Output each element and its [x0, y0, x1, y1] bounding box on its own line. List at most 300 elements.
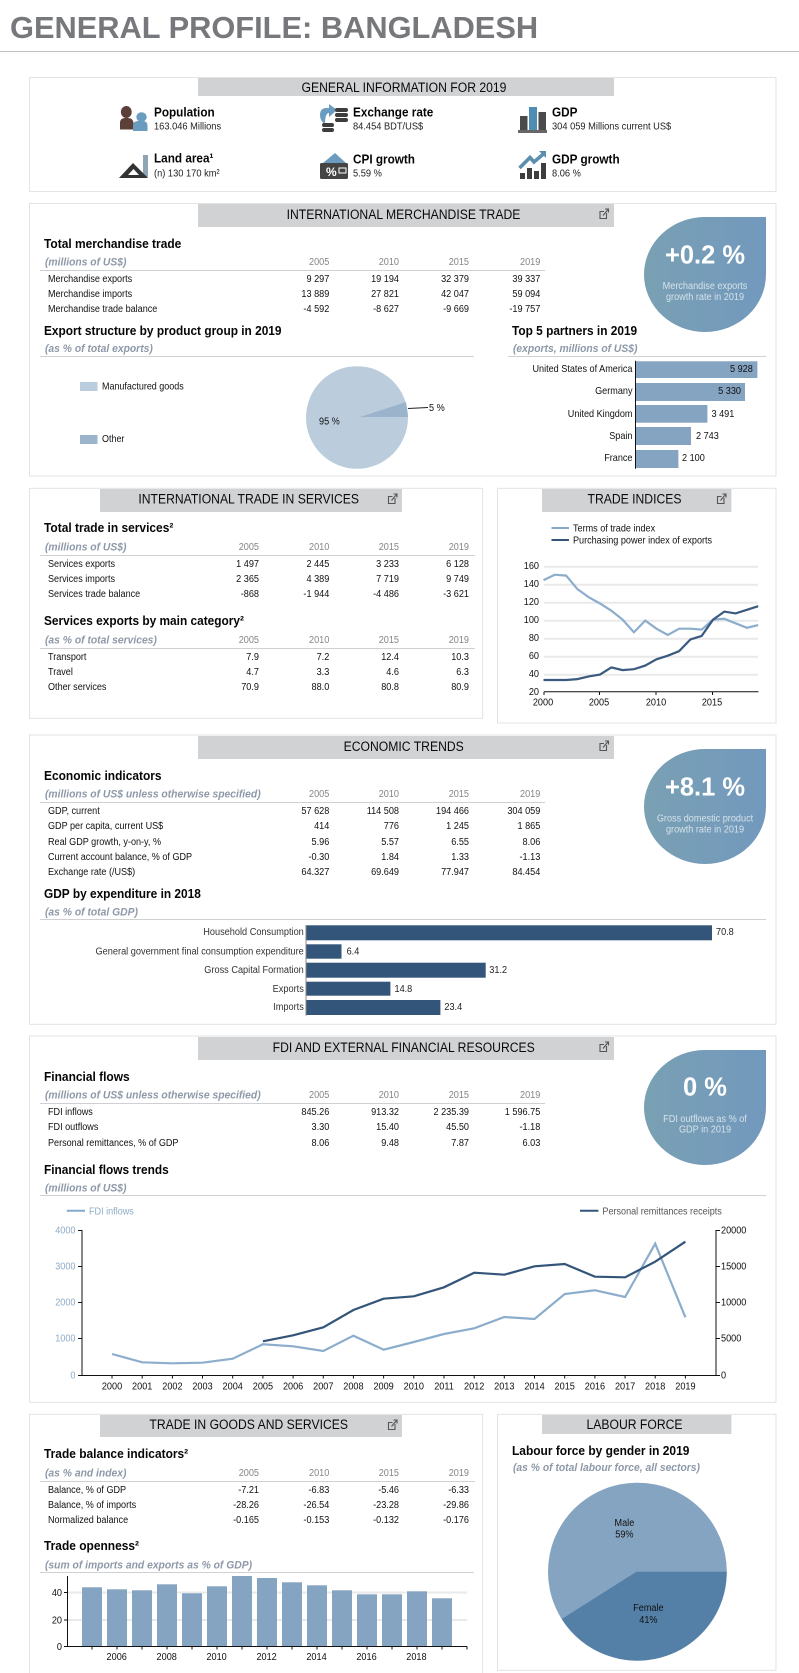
- table: total merchandise trade: 59 094: [512, 288, 541, 300]
- table: total trade in services: 2019: [449, 541, 469, 553]
- table: trade balance indicators: Balance, % of GDP: [48, 1484, 127, 1496]
- legend: export structure: [80, 381, 184, 445]
- table: economic indicators: Exchange rate (/US$): [48, 866, 135, 878]
- line chart: financial flows trends: 3000: [55, 1261, 76, 1273]
- callout: merchandise exports growth: Merchandise exports: [663, 280, 747, 292]
- stat: population: 163.046 Millions: [154, 121, 221, 133]
- table: economic indicators: 304 059: [507, 805, 540, 817]
- legend: trade indices: Terms of trade index: [573, 523, 655, 535]
- pie chart: export structure: [306, 366, 445, 469]
- table: economic indicators: 5.96: [312, 836, 330, 848]
- line chart: trade indices: [524, 560, 758, 709]
- table: total trade in services: -1 944: [303, 588, 330, 600]
- panel: fdi and external financial resources: [30, 1036, 776, 1402]
- table: total trade in services: 2 365: [236, 573, 259, 585]
- table: economic indicators: Current account balance, % of GDP: [48, 851, 193, 863]
- table: economic indicators: 1.33: [451, 851, 469, 863]
- pie chart: labour force by gender: Female: [633, 1602, 664, 1614]
- table: trade balance indicators: -0.165: [233, 1514, 259, 1526]
- line chart: financial flows trends: 0: [721, 1370, 727, 1382]
- stat: exchange rate: Exchange rate: [353, 105, 434, 120]
- stat: cpi growth: [353, 152, 415, 180]
- bar chart: gdp by expenditure: Imports: [273, 1001, 304, 1013]
- table: total trade in services: 3 233: [376, 558, 399, 570]
- heading: fdi and external financial resources: FDI AND EXTERNAL FINANCIAL RESOURCES: [273, 1039, 535, 1055]
- table: financial flows: 45.50: [446, 1121, 469, 1133]
- line chart: financial flows trends: 2005: [253, 1381, 274, 1393]
- table: economic indicators: 77.947: [441, 866, 469, 878]
- table: economic indicators: Real GDP growth, y-on-y, %: [48, 836, 161, 848]
- table: economic indicators: 57 628: [301, 805, 330, 817]
- line chart: financial flows trends: 2011: [434, 1381, 454, 1393]
- callout: fdi outflows: 0 %: [683, 1074, 727, 1102]
- line chart: financial flows trends: 2013: [494, 1381, 515, 1393]
- stat: gdp: [552, 105, 672, 133]
- icon: external link: [388, 494, 397, 504]
- table: trade balance indicators: 2015: [379, 1467, 399, 1479]
- heading: gdp by expenditure: [40, 887, 766, 920]
- bar chart: trade openness: [52, 1576, 467, 1663]
- table: total merchandise trade: 13 889: [301, 288, 329, 300]
- line chart: financial flows trends: 1000: [55, 1333, 76, 1345]
- callout: merchandise exports growth: +0.2 %: [665, 242, 745, 270]
- line chart: financial flows trends: 2007: [313, 1381, 333, 1393]
- bar chart: top 5 partners: 5 330: [718, 385, 741, 397]
- table: total merchandise trade: 39 337: [512, 273, 540, 285]
- heading: gdp by expenditure: (as % of total GDP): [45, 906, 138, 919]
- bar chart: trade openness: 0: [57, 1641, 62, 1653]
- table: financial flows: 9.48: [381, 1137, 399, 1149]
- heading: financial flows trends: (millions of US$): [45, 1182, 127, 1195]
- icon: gdp growth: [520, 151, 546, 179]
- table: trade balance indicators: -0.153: [303, 1514, 330, 1526]
- table: economic indicators: 114 508: [367, 805, 399, 817]
- heading: top 5 partners: (exports, millions of US$): [513, 343, 638, 355]
- line chart: financial flows trends: 2002: [162, 1381, 183, 1393]
- table: financial flows: Personal remittances, % of GDP: [48, 1137, 179, 1149]
- bar chart: trade openness: 2008: [157, 1651, 177, 1663]
- table: total merchandise trade: 9 297: [306, 273, 329, 285]
- pie chart: labour force by gender: Male: [615, 1517, 635, 1529]
- panel: economic trends: [30, 735, 776, 1024]
- line chart: financial flows trends: 2012: [464, 1381, 484, 1393]
- heading: export structure: Export structure by product group in 2019: [44, 324, 282, 338]
- stat: gdp growth: [552, 152, 620, 180]
- panel: trade indices: [498, 488, 776, 723]
- table: total trade in services: Services imports: [48, 573, 115, 585]
- table: total trade in services: -3 621: [443, 588, 469, 600]
- table: services exports by main category: 2005: [239, 634, 259, 646]
- table: total merchandise trade: 32 379: [441, 273, 469, 285]
- table: economic indicators: -1.13: [520, 851, 541, 863]
- heading: top 5 partners: Top 5 partners in 2019: [512, 324, 637, 338]
- table: total merchandise trade: 19 194: [371, 273, 399, 285]
- table: financial flows: 15.40: [376, 1121, 399, 1133]
- table: total merchandise trade: 42 047: [441, 288, 469, 300]
- table: services exports by main category: 80.8: [381, 681, 399, 693]
- table: total trade in services: Total trade in services²: [44, 521, 173, 535]
- line chart: trade indices: 40: [529, 668, 539, 680]
- table: economic indicators: 194 466: [436, 805, 469, 817]
- stat: gdp: GDP: [552, 105, 577, 120]
- table: total trade in services: 6 128: [446, 558, 469, 570]
- table: total trade in services: 2010: [309, 541, 330, 553]
- callout: gdp growth rate: growth rate in 2019: [666, 824, 744, 836]
- table: economic indicators: 69.649: [371, 866, 399, 878]
- bar chart: top 5 partners: 2 100: [682, 452, 705, 464]
- legend: export structure: Manufactured goods: [102, 381, 184, 393]
- table: services exports by main category: Travel: [48, 666, 73, 678]
- table: economic indicators: 2005: [309, 788, 330, 800]
- callout: gdp growth rate: Gross domestic product: [657, 813, 753, 825]
- icon: external link: [600, 209, 608, 218]
- subheading: labour force by gender: [512, 1444, 700, 1474]
- table: trade balance indicators: 2005: [239, 1467, 259, 1479]
- stat: population: Population: [154, 105, 215, 120]
- table: total merchandise trade: -19 757: [509, 303, 540, 315]
- bar chart: trade openness: 2018: [406, 1651, 427, 1663]
- callout: merchandise exports growth: [644, 217, 766, 332]
- table: financial flows: (millions of US$ unless otherwise specified): [45, 1089, 261, 1101]
- table: trade balance indicators: -0.132: [373, 1514, 399, 1526]
- table: financial flows: -1.18: [520, 1121, 541, 1133]
- heading: top 5 partners: [508, 324, 766, 356]
- stat: land area: (n) 130 170 km²: [154, 168, 220, 180]
- bar chart: top 5 partners: United States of America: [532, 363, 633, 375]
- table: economic indicators: 8.06: [523, 836, 541, 848]
- stat: land area: [154, 151, 220, 180]
- table: economic indicators: 84.454: [512, 866, 541, 878]
- table: trade balance indicators: -26.54: [303, 1499, 330, 1511]
- panel: trade in goods and services: [30, 1414, 483, 1673]
- line chart: financial flows trends: 2014: [524, 1381, 545, 1393]
- heading: labour force: LABOUR FORCE: [586, 1416, 683, 1432]
- line chart: financial flows trends: 2000: [55, 1297, 76, 1309]
- table: services exports by main category: 7.2: [317, 651, 329, 663]
- table: services exports by main category: 88.0: [312, 681, 330, 693]
- panel: general information: [30, 78, 776, 192]
- table: total merchandise trade: -8 627: [373, 303, 399, 315]
- icon: cpi growth: %: [326, 165, 337, 179]
- legend: financial flows trends: FDI inflows: [89, 1206, 134, 1218]
- bar chart: trade openness: 2006: [107, 1651, 127, 1663]
- line chart: financial flows trends: 20000: [721, 1225, 747, 1237]
- table: economic indicators: [40, 769, 545, 878]
- line chart: financial flows trends: 15000: [721, 1261, 747, 1273]
- table: financial flows: Financial flows: [44, 1070, 130, 1084]
- line chart: trade indices: 2005: [589, 697, 610, 709]
- table: total trade in services: -4 486: [373, 588, 399, 600]
- table: economic indicators: GDP, current: [48, 805, 100, 817]
- pie chart: export structure: 95 %: [319, 416, 340, 428]
- bar chart: gdp by expenditure: General government final consumption expenditure: [96, 946, 304, 958]
- table: services exports by main category: 2015: [379, 634, 399, 646]
- table: trade balance indicators: -0.176: [443, 1514, 469, 1526]
- bar chart: trade openness: 2010: [206, 1651, 227, 1663]
- heading: trade openness: [40, 1539, 474, 1572]
- table: trade balance indicators: Normalized balance: [48, 1514, 129, 1526]
- line chart: trade indices: 160: [524, 560, 539, 572]
- line chart: financial flows trends: 2009: [373, 1381, 394, 1393]
- icon: gdp: [518, 107, 547, 133]
- bar chart: trade openness: 2014: [306, 1651, 327, 1663]
- stat: gdp growth: 8.06 %: [552, 168, 581, 180]
- line chart: financial flows trends: 2015: [555, 1381, 575, 1393]
- callout: merchandise exports growth: growth rate in 2019: [666, 291, 744, 303]
- table: financial flows: 2 235.39: [433, 1106, 469, 1118]
- table: services exports by main category: (as % of total services): [45, 634, 157, 646]
- line chart: financial flows trends: 2006: [283, 1381, 304, 1393]
- table: economic indicators: GDP per capita, current US$: [48, 820, 164, 832]
- line chart: trade indices: 100: [524, 614, 539, 626]
- table: total merchandise trade: 2015: [449, 256, 469, 268]
- bar chart: gdp by expenditure: [96, 925, 734, 1016]
- table: trade balance indicators: Balance, % of imports: [48, 1499, 136, 1511]
- heading: international trade in services: INTERNATIONAL TRADE IN SERVICES: [138, 491, 359, 507]
- table: services exports by main category: Transport: [48, 651, 87, 663]
- icon: population: [120, 106, 148, 131]
- table: services exports by main category: 70.9: [241, 681, 259, 693]
- subheading: labour force by gender: (as % of total labour force, all sectors): [513, 1462, 700, 1474]
- table: trade balance indicators: 2019: [449, 1467, 469, 1479]
- table: economic indicators: 2019: [520, 788, 540, 800]
- line chart: financial flows trends: 10000: [721, 1297, 747, 1309]
- table: services exports by main category: Services exports by main category²: [44, 614, 244, 628]
- icon: external link: [600, 741, 608, 750]
- icon: external link: [600, 1042, 608, 1052]
- bar chart: top 5 partners: Germany: [595, 385, 633, 397]
- table: financial flows: 1 596.75: [505, 1106, 541, 1118]
- line chart: financial flows trends: 2000: [102, 1381, 123, 1393]
- table: total trade in services: 7 719: [376, 573, 399, 585]
- table: financial flows: 8.06: [312, 1137, 330, 1149]
- table: economic indicators: 64.327: [301, 866, 329, 878]
- table: services exports by main category: 4.7: [246, 666, 259, 678]
- pie chart: labour force by gender: 59%: [615, 1529, 634, 1541]
- table: trade balance indicators: 2010: [309, 1467, 330, 1479]
- stat: cpi growth: 5.59 %: [353, 168, 382, 180]
- legend: financial flows trends: [67, 1206, 722, 1218]
- line chart: financial flows trends: 2018: [645, 1381, 666, 1393]
- line chart: financial flows trends: 2003: [192, 1381, 213, 1393]
- table: financial flows: [40, 1070, 545, 1149]
- table: financial flows: 7.87: [451, 1137, 469, 1149]
- bar chart: trade openness: 2016: [356, 1651, 377, 1663]
- bar chart: trade openness: 40: [52, 1587, 62, 1599]
- icon: exchange rate: [320, 104, 348, 132]
- table: economic indicators: 2015: [449, 788, 469, 800]
- table: services exports by main category: 80.9: [451, 681, 469, 693]
- icon: external link: [718, 494, 726, 504]
- icon: land area: [119, 155, 148, 178]
- stat: cpi growth: CPI growth: [353, 152, 415, 166]
- line chart: trade indices: 2000: [533, 697, 554, 709]
- callout: gdp growth rate: +8.1 %: [665, 774, 745, 802]
- table: economic indicators: 6.55: [451, 836, 469, 848]
- table: total trade in services: 1 497: [236, 558, 259, 570]
- table: total trade in services: 9 749: [446, 573, 469, 585]
- line chart: financial flows trends: 4000: [55, 1225, 76, 1237]
- stat: land area: Land area¹: [154, 151, 213, 166]
- table: trade balance indicators: -6.83: [309, 1484, 330, 1496]
- table: trade balance indicators: -28.26: [233, 1499, 259, 1511]
- bar chart: gdp by expenditure: Household Consumption: [203, 926, 304, 938]
- bar chart: top 5 partners: [532, 361, 757, 469]
- heading: export structure: (as % of total exports): [45, 343, 153, 355]
- stat: exchange rate: 84.454 BDT/US$: [353, 121, 424, 133]
- bar chart: top 5 partners: France: [604, 452, 633, 464]
- table: total merchandise trade: 2010: [379, 256, 399, 268]
- line chart: financial flows trends: 2016: [585, 1381, 606, 1393]
- table: trade balance indicators: -7.21: [238, 1484, 259, 1496]
- table: services exports by main category: 7.9: [246, 651, 259, 663]
- stat: exchange rate: [353, 105, 434, 133]
- line chart: trade indices: 120: [524, 596, 539, 608]
- table: financial flows: 3.30: [312, 1121, 330, 1133]
- table: services exports by main category: 2010: [309, 634, 330, 646]
- table: services exports by main category: 3.3: [317, 666, 330, 678]
- bar chart: trade openness: 2012: [256, 1651, 277, 1663]
- table: total merchandise trade: Merchandise trade balance: [48, 303, 158, 315]
- bar chart: gdp by expenditure: 6.4: [347, 946, 360, 958]
- table: total trade in services: [40, 521, 475, 600]
- panel: international trade in services: [30, 488, 483, 718]
- table: total merchandise trade: -4 592: [303, 303, 329, 315]
- line chart: financial flows trends: [55, 1225, 747, 1393]
- table: economic indicators: 5.57: [381, 836, 399, 848]
- line chart: trade indices: 140: [524, 578, 539, 590]
- table: total merchandise trade: (millions of US$): [45, 256, 127, 269]
- heading: financial flows trends: [40, 1163, 766, 1196]
- table: total trade in services: (millions of US$): [45, 541, 127, 553]
- table: services exports by main category: 2019: [449, 634, 469, 646]
- line chart: financial flows trends: 2008: [343, 1381, 364, 1393]
- legend: financial flows trends: Personal remittances receipts: [602, 1206, 722, 1218]
- table: total trade in services: 4 389: [306, 573, 329, 585]
- table: economic indicators: Economic indicators: [44, 769, 162, 783]
- line chart: trade indices: 2015: [702, 697, 723, 709]
- heading: trade openness: Trade openness²: [44, 1539, 139, 1553]
- bar chart: gdp by expenditure: 14.8: [394, 983, 413, 995]
- table: total trade in services: 2015: [379, 541, 399, 553]
- bar chart: gdp by expenditure: 31.2: [489, 964, 507, 976]
- table: economic indicators: 1 865: [517, 820, 541, 832]
- table: economic indicators: 776: [384, 820, 399, 832]
- table: services exports by main category: 10.3: [451, 651, 469, 663]
- heading: trade indices: TRADE INDICES: [588, 491, 682, 507]
- table: trade balance indicators: [40, 1447, 475, 1526]
- title: GENERAL PROFILE: BANGLADESH: [10, 10, 538, 45]
- legend: trade indices: Purchasing power index of exports: [573, 535, 712, 547]
- table: services exports by main category: [40, 614, 475, 693]
- line chart: trade indices: 20: [529, 686, 539, 698]
- table: services exports by main category: Other services: [48, 681, 107, 693]
- table: total merchandise trade: 2019: [520, 256, 540, 268]
- heading: economic trends: ECONOMIC TRENDS: [344, 738, 464, 754]
- line chart: financial flows trends: 2019: [675, 1381, 696, 1393]
- heading: trade in goods and services: TRADE IN GOODS AND SERVICES: [149, 1416, 348, 1432]
- table: trade balance indicators: -5.46: [378, 1484, 399, 1496]
- callout: fdi outflows: GDP in 2019: [679, 1124, 731, 1136]
- line chart: financial flows trends: 0: [70, 1370, 76, 1382]
- table: economic indicators: 2010: [379, 788, 399, 800]
- stat: gdp growth: GDP growth: [552, 152, 620, 166]
- line chart: trade indices: 60: [529, 650, 539, 662]
- pie chart: labour force by gender: [548, 1483, 727, 1661]
- callout: fdi outflows: [644, 1050, 766, 1165]
- heading: export structure: [40, 324, 474, 356]
- table: financial flows: 2019: [520, 1089, 540, 1101]
- legend: export structure: Other: [102, 433, 125, 445]
- pie chart: export structure: 5 %: [429, 402, 445, 414]
- table: total merchandise trade: 2005: [309, 256, 330, 268]
- bar chart: gdp by expenditure: 70.8: [716, 926, 734, 938]
- table: total merchandise trade: 27 821: [371, 288, 399, 300]
- table: economic indicators: (millions of US$ unless otherwise specified): [45, 788, 261, 801]
- table: total merchandise trade: -9 669: [443, 303, 469, 315]
- line chart: financial flows trends: 2001: [132, 1381, 152, 1393]
- table: trade balance indicators: (as % and index): [45, 1467, 127, 1479]
- table: services exports by main category: 12.4: [381, 651, 399, 663]
- heading: financial flows trends: Financial flows trends: [44, 1163, 169, 1177]
- table: financial flows: 913.32: [371, 1106, 399, 1118]
- pie chart: labour force by gender: 41%: [639, 1614, 658, 1626]
- bar chart: gdp by expenditure: Gross Capital Formation: [204, 964, 304, 976]
- table: total trade in services: Services exports: [48, 558, 115, 570]
- table: financial flows: FDI inflows: [48, 1106, 93, 1118]
- bar chart: trade openness: 20: [52, 1615, 62, 1627]
- icon: external link: [388, 1420, 397, 1430]
- table: services exports by main category: 6.3: [456, 666, 469, 678]
- stat: gdp: 304 059 Millions current US$: [552, 121, 672, 133]
- table: financial flows: FDI outflows: [48, 1121, 98, 1133]
- table: total trade in services: Services trade balance: [48, 588, 141, 600]
- table: economic indicators: 414: [314, 820, 330, 832]
- bar chart: gdp by expenditure: Exports: [273, 983, 304, 995]
- line chart: financial flows trends: 2004: [223, 1381, 243, 1393]
- bar chart: top 5 partners: 2 743: [696, 430, 719, 442]
- icon: cpi growth: [320, 153, 348, 179]
- bar chart: top 5 partners: United Kingdom: [568, 408, 632, 420]
- table: economic indicators: 1 245: [446, 820, 469, 832]
- table: financial flows: 6.03: [523, 1137, 541, 1149]
- table: financial flows: 2010: [379, 1089, 399, 1101]
- bar chart: top 5 partners: Spain: [609, 430, 632, 442]
- heading: general information: GENERAL INFORMATION FOR 2019: [302, 79, 506, 95]
- line chart: financial flows trends: 5000: [721, 1333, 742, 1345]
- table: financial flows: 2005: [309, 1089, 330, 1101]
- stat: population: [154, 105, 221, 133]
- table: economic indicators: -0.30: [309, 851, 330, 863]
- table: financial flows: 845.26: [301, 1106, 330, 1118]
- line chart: trade indices: 2010: [646, 697, 667, 709]
- table: trade balance indicators: -23.28: [373, 1499, 399, 1511]
- table: trade balance indicators: -29.86: [443, 1499, 469, 1511]
- panel: international merchandise trade: [30, 204, 776, 476]
- callout: gdp growth rate: [644, 749, 766, 864]
- table: total trade in services: 2005: [239, 541, 259, 553]
- table: total trade in services: 2 445: [306, 558, 330, 570]
- bar chart: gdp by expenditure: 23.4: [444, 1001, 463, 1013]
- line chart: financial flows trends: 2017: [615, 1381, 635, 1393]
- callout: fdi outflows: FDI outflows as % of: [663, 1113, 747, 1125]
- table: total trade in services: -868: [241, 588, 259, 600]
- table: trade balance indicators: Trade balance indicators²: [44, 1447, 188, 1461]
- table: total merchandise trade: Merchandise imports: [48, 288, 132, 300]
- bar chart: top 5 partners: 5 928: [730, 363, 753, 375]
- table: total merchandise trade: Total merchandise trade: [44, 237, 181, 251]
- panel: labour force: [498, 1414, 776, 1670]
